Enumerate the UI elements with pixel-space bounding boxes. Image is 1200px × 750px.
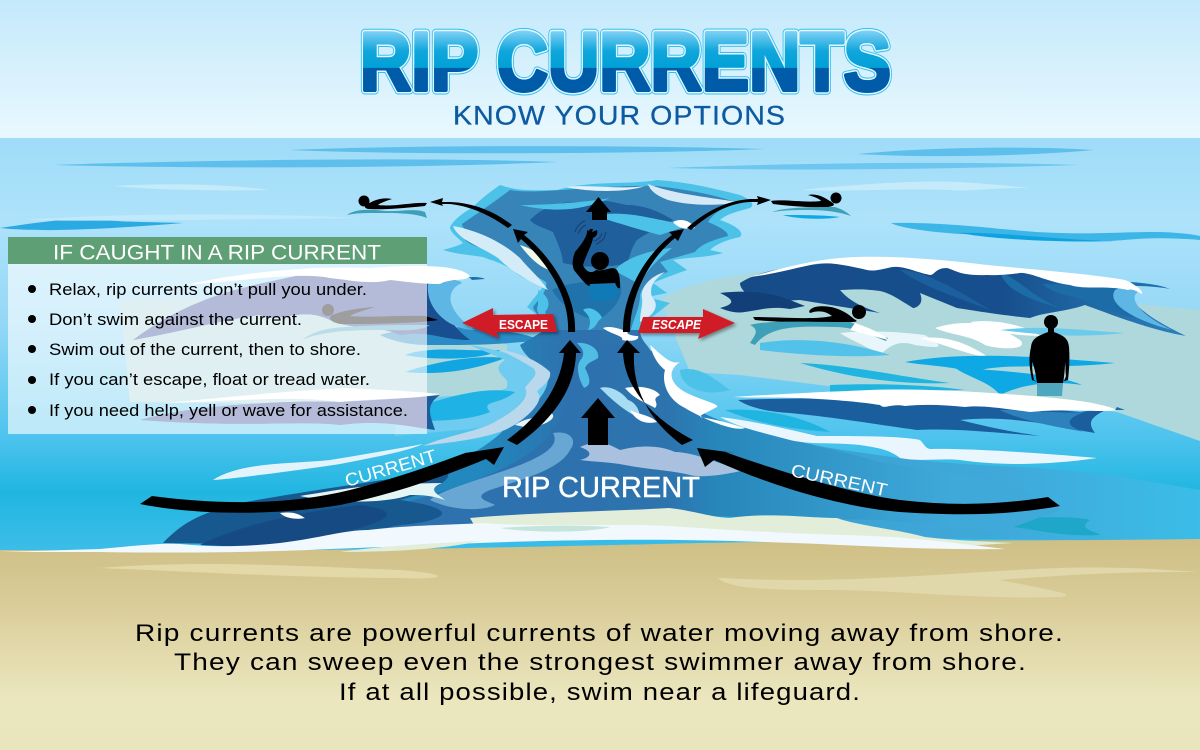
upper body — [462, 186, 735, 345]
right cyan water streaks — [760, 328, 1125, 395]
subtitle: KNOW YOUR OPTIONS — [453, 100, 786, 130]
title: RIP CURRENTS — [360, 15, 891, 108]
label: current left: CURRENT — [343, 446, 438, 491]
upper foam fringe — [443, 180, 752, 333]
small wave crest foam — [733, 389, 1117, 412]
pale foam edge left — [423, 350, 550, 446]
summary text: They can sweep even the strongest swimmer away from shore. — [174, 649, 1027, 676]
curved arrow: long-shore current from left — [140, 447, 504, 513]
right foam swirl — [840, 321, 1040, 358]
upper dark pool — [530, 201, 673, 267]
distant water streaks — [0, 146, 1200, 242]
escape arrow left: ESCAPE — [499, 318, 548, 332]
curved arrow: escape route up right — [623, 196, 771, 332]
info panel: if caught in a rip current — [8, 237, 427, 434]
swimmer: top right — [771, 192, 851, 219]
curved arrow: feeder left — [507, 340, 581, 445]
shallow sandbar water — [120, 272, 1200, 441]
white foam edge right — [650, 345, 745, 429]
cyan water streaks on sandbar, left — [380, 327, 546, 436]
centre channel — [280, 345, 620, 545]
rip current body — [163, 180, 1060, 548]
tip list — [28, 281, 408, 420]
escape arrow right: ESCAPE — [652, 318, 702, 332]
tip list: If you need help, yell or wave for assistance. — [49, 402, 408, 420]
person waving for help — [573, 221, 620, 301]
beach sand — [0, 539, 1200, 750]
lower body — [163, 330, 1060, 545]
panel heading — [8, 237, 427, 264]
tip list: If you can’t escape, float or tread water. — [49, 371, 370, 389]
swimmer: top left — [347, 196, 427, 218]
curved arrow: escape route up left — [430, 198, 575, 332]
summary text — [135, 620, 1064, 706]
title: RIP CURRENTS — [360, 15, 891, 108]
left large wave under panel — [133, 266, 485, 340]
summary text: Rip currents are powerful currents of water moving away from shore. — [135, 620, 1064, 647]
tip list: Don’t swim against the current. — [49, 311, 302, 329]
sky header background — [0, 0, 1200, 138]
large wave right — [720, 257, 1186, 336]
label: current right: CURRENT — [789, 460, 889, 500]
summary text: If at all possible, swim near a lifeguard. — [339, 679, 861, 706]
left wave crest foam — [185, 266, 470, 285]
center arrow: upper — [586, 197, 611, 220]
lower right water band — [690, 422, 1200, 541]
ocean background — [0, 138, 1200, 553]
escape arrow left — [462, 308, 557, 338]
label: rip current: RIP CURRENT — [502, 472, 700, 504]
rip foam details — [213, 184, 1097, 519]
person standing in water — [1029, 315, 1069, 396]
teal shadow in shallows — [980, 517, 1100, 535]
small wave right — [733, 389, 1125, 436]
central swirls — [577, 343, 598, 388]
title: RIP CURRENTS — [360, 15, 891, 108]
wave crest foam — [750, 257, 1142, 294]
shore foam — [0, 508, 1013, 553]
pale churned water — [580, 443, 745, 476]
tip list: Relax, rip currents don’t pull you under. — [49, 281, 367, 299]
curved arrow: long-shore current from right — [697, 448, 1060, 514]
swimmer: right — [750, 305, 888, 345]
left small wave under panel — [140, 388, 440, 430]
escape arrow right — [638, 309, 735, 339]
tip list: Swim out of the current, then to shore. — [49, 341, 361, 359]
curved arrow: feeder right — [617, 340, 693, 445]
center arrow: lower — [581, 398, 615, 445]
faded swimmer under panel — [302, 304, 438, 340]
panel heading: IF CAUGHT IN A RIP CURRENT — [53, 240, 381, 264]
